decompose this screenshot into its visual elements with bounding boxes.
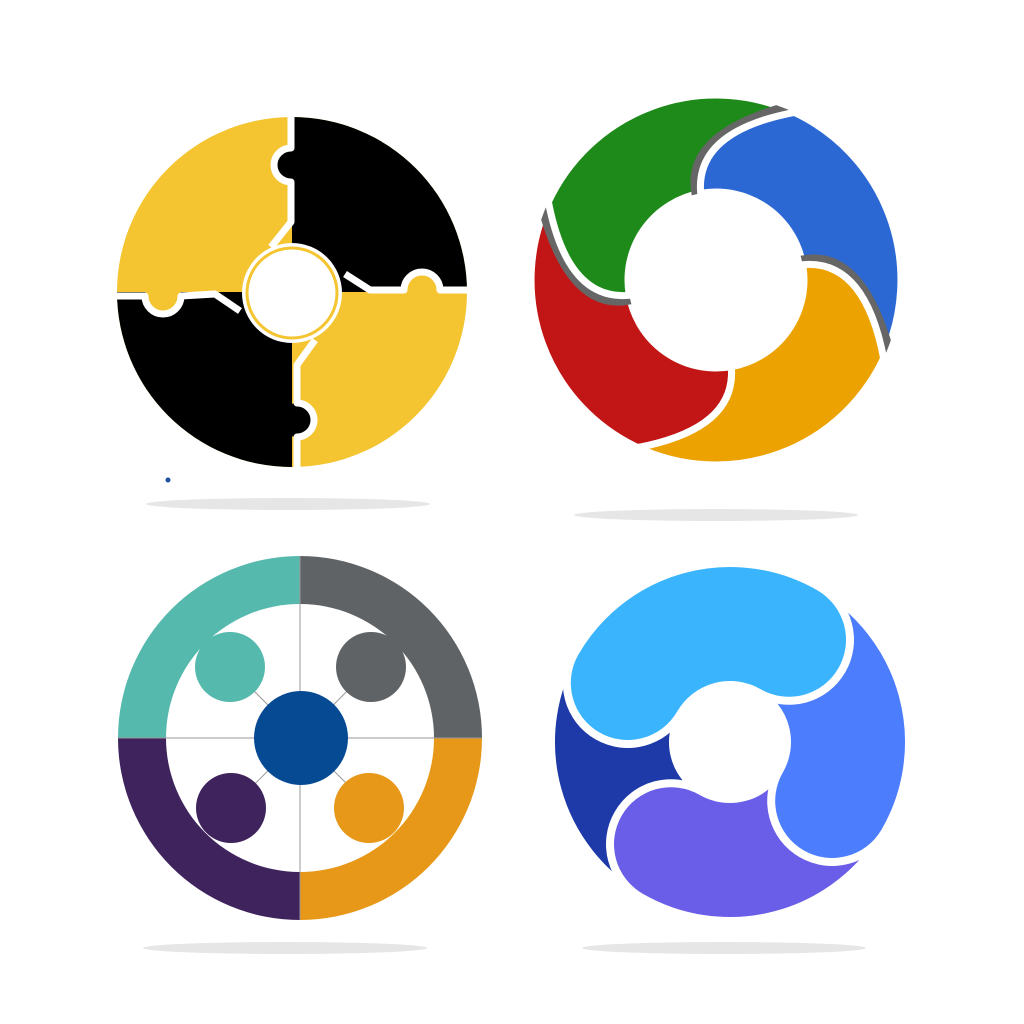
dot	[166, 478, 170, 482]
diagram: blue pinwheel	[612, 624, 848, 860]
diagram: ring with nodes	[118, 556, 482, 920]
diagram: puzzle circle	[110, 110, 474, 474]
shadows	[143, 498, 866, 954]
diagram: swirl ring	[510, 73, 923, 487]
